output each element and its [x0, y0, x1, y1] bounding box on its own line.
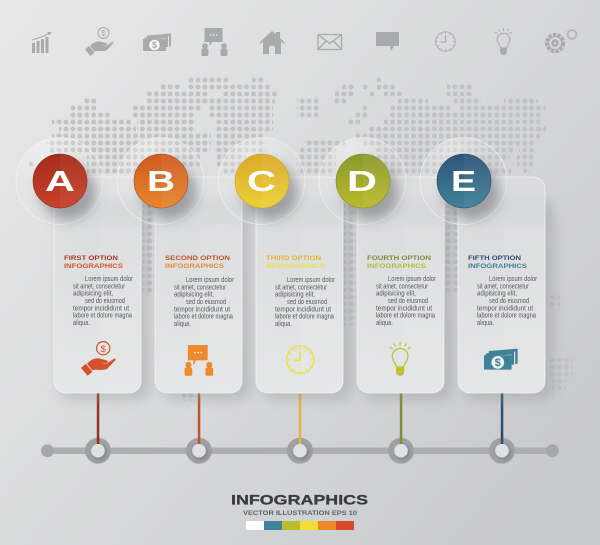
body text E: sed do eiusmod	[489, 298, 529, 305]
footer title	[231, 492, 368, 530]
marker A	[85, 438, 111, 464]
icon: hand with coin	[85, 28, 114, 56]
body text E: tempor incididunt ut	[477, 305, 533, 312]
icon: speech bubble	[376, 32, 399, 51]
timeline start dot	[41, 444, 54, 457]
icon: house	[259, 31, 285, 54]
colour legend bar	[246, 521, 354, 530]
letter B: B	[147, 166, 175, 198]
icon: hand with coin	[81, 342, 116, 376]
stem A	[97, 392, 99, 444]
heading: fifth option: FIFTH OPTION	[468, 255, 522, 262]
icon: people talking	[202, 28, 228, 56]
letter C: C	[247, 166, 276, 198]
heading: second option: INFOGRAPHICS	[165, 263, 224, 270]
heading: third option: THIRD OPTION	[266, 255, 322, 262]
body text E: Lorem ipsum dolor	[489, 276, 538, 283]
badge D	[319, 138, 406, 224]
icon: hand with coin: $	[101, 344, 107, 355]
top icon row	[32, 28, 577, 56]
body text C: labore et dolore magna	[275, 314, 334, 321]
panel: card A	[54, 177, 150, 400]
body text A: tempor incididunt ut	[73, 305, 129, 312]
body text A: adipisicing elit,	[73, 291, 113, 298]
heading: fourth option: INFOGRAPHICS	[367, 263, 426, 270]
body text A: sit amet, consectetur	[73, 283, 126, 290]
stem C	[299, 392, 301, 444]
icon: bar chart growth	[32, 32, 52, 53]
badge C	[218, 138, 305, 224]
marker E	[489, 438, 515, 464]
badge B	[117, 138, 204, 224]
dotted world map	[27, 76, 573, 400]
icon: clock	[286, 346, 314, 373]
body text D: tempor incididunt ut	[376, 305, 432, 312]
body text D: Lorem ipsum dolor	[388, 276, 437, 283]
heading: fourth option: FOURTH OPTION	[367, 255, 432, 262]
body text B: tempor incididunt ut	[174, 306, 230, 313]
letter A: A	[45, 166, 75, 198]
badge E	[420, 138, 507, 224]
icon: banknotes: $	[495, 357, 501, 369]
icon: light bulb	[390, 342, 411, 376]
heading: first option: INFOGRAPHICS	[64, 263, 123, 270]
body text D: sed do eiusmod	[388, 298, 428, 305]
body text B: sed do eiusmod	[186, 299, 226, 306]
body text E: labore et dolore magna	[477, 313, 536, 320]
timeline end dot	[546, 444, 559, 457]
body text E: aliqua.	[477, 320, 494, 327]
stem D	[400, 392, 402, 444]
marker D	[388, 438, 414, 464]
icon: envelope	[318, 34, 342, 50]
body text C: sit amet, consectetur	[275, 284, 328, 291]
panel: card B	[155, 177, 251, 400]
icon: banknotes	[484, 349, 518, 370]
stem B	[198, 392, 200, 444]
body text D: aliqua.	[376, 320, 393, 327]
heading: first option: FIRST OPTION	[64, 255, 119, 262]
panel: card C	[256, 177, 352, 400]
letter D: D	[347, 166, 377, 198]
body text C: sed do eiusmod	[287, 299, 327, 306]
body text D: sit amet, consectetur	[376, 283, 429, 290]
body text B: adipisicing elit,	[174, 292, 214, 299]
icon: gears	[546, 30, 577, 52]
timeline	[41, 438, 559, 464]
body text C: adipisicing elit,	[275, 292, 315, 299]
timeline bar	[47, 448, 552, 454]
body text D: labore et dolore magna	[376, 313, 435, 320]
body text C: Lorem ipsum dolor	[287, 277, 336, 284]
body text B: Lorem ipsum dolor	[186, 277, 235, 284]
subtitle: VECTOR ILLUSTRATION EPS 10	[243, 511, 358, 517]
icon: banknotes	[143, 34, 171, 51]
heading: fifth option: INFOGRAPHICS	[468, 263, 527, 270]
body text A: labore et dolore magna	[73, 313, 132, 320]
body text E: adipisicing elit,	[477, 291, 517, 298]
body text B: labore et dolore magna	[174, 314, 233, 321]
body text E: sit amet, consectetur	[477, 283, 530, 290]
body text A: sed do eiusmod	[85, 298, 125, 305]
body text A: Lorem ipsum dolor	[85, 276, 134, 283]
heading: second option: SECOND OPTION	[165, 255, 231, 262]
connector stems	[97, 392, 503, 444]
icon: hand with coin: $	[101, 29, 106, 38]
panel: card D	[357, 177, 453, 400]
title: INFOGRAPHICS	[231, 492, 368, 508]
body text A: aliqua.	[73, 320, 90, 327]
badge A	[16, 138, 103, 224]
icon: people talking	[185, 345, 213, 376]
heading: third option: INFOGRAPHICS	[266, 263, 325, 270]
body text B: sit amet, consectetur	[174, 284, 227, 291]
panel: card E	[458, 177, 554, 400]
body text B: aliqua.	[174, 321, 191, 328]
marker B	[186, 438, 212, 464]
marker C	[287, 438, 313, 464]
icon: clock	[436, 32, 455, 51]
body text D: adipisicing elit,	[376, 291, 416, 298]
icon: banknotes: $	[152, 40, 157, 50]
icon: light bulb	[495, 28, 512, 55]
body text C: tempor incididunt ut	[275, 306, 331, 313]
stem E	[501, 392, 503, 444]
body text C: aliqua.	[275, 321, 292, 328]
letter E: E	[451, 166, 476, 198]
